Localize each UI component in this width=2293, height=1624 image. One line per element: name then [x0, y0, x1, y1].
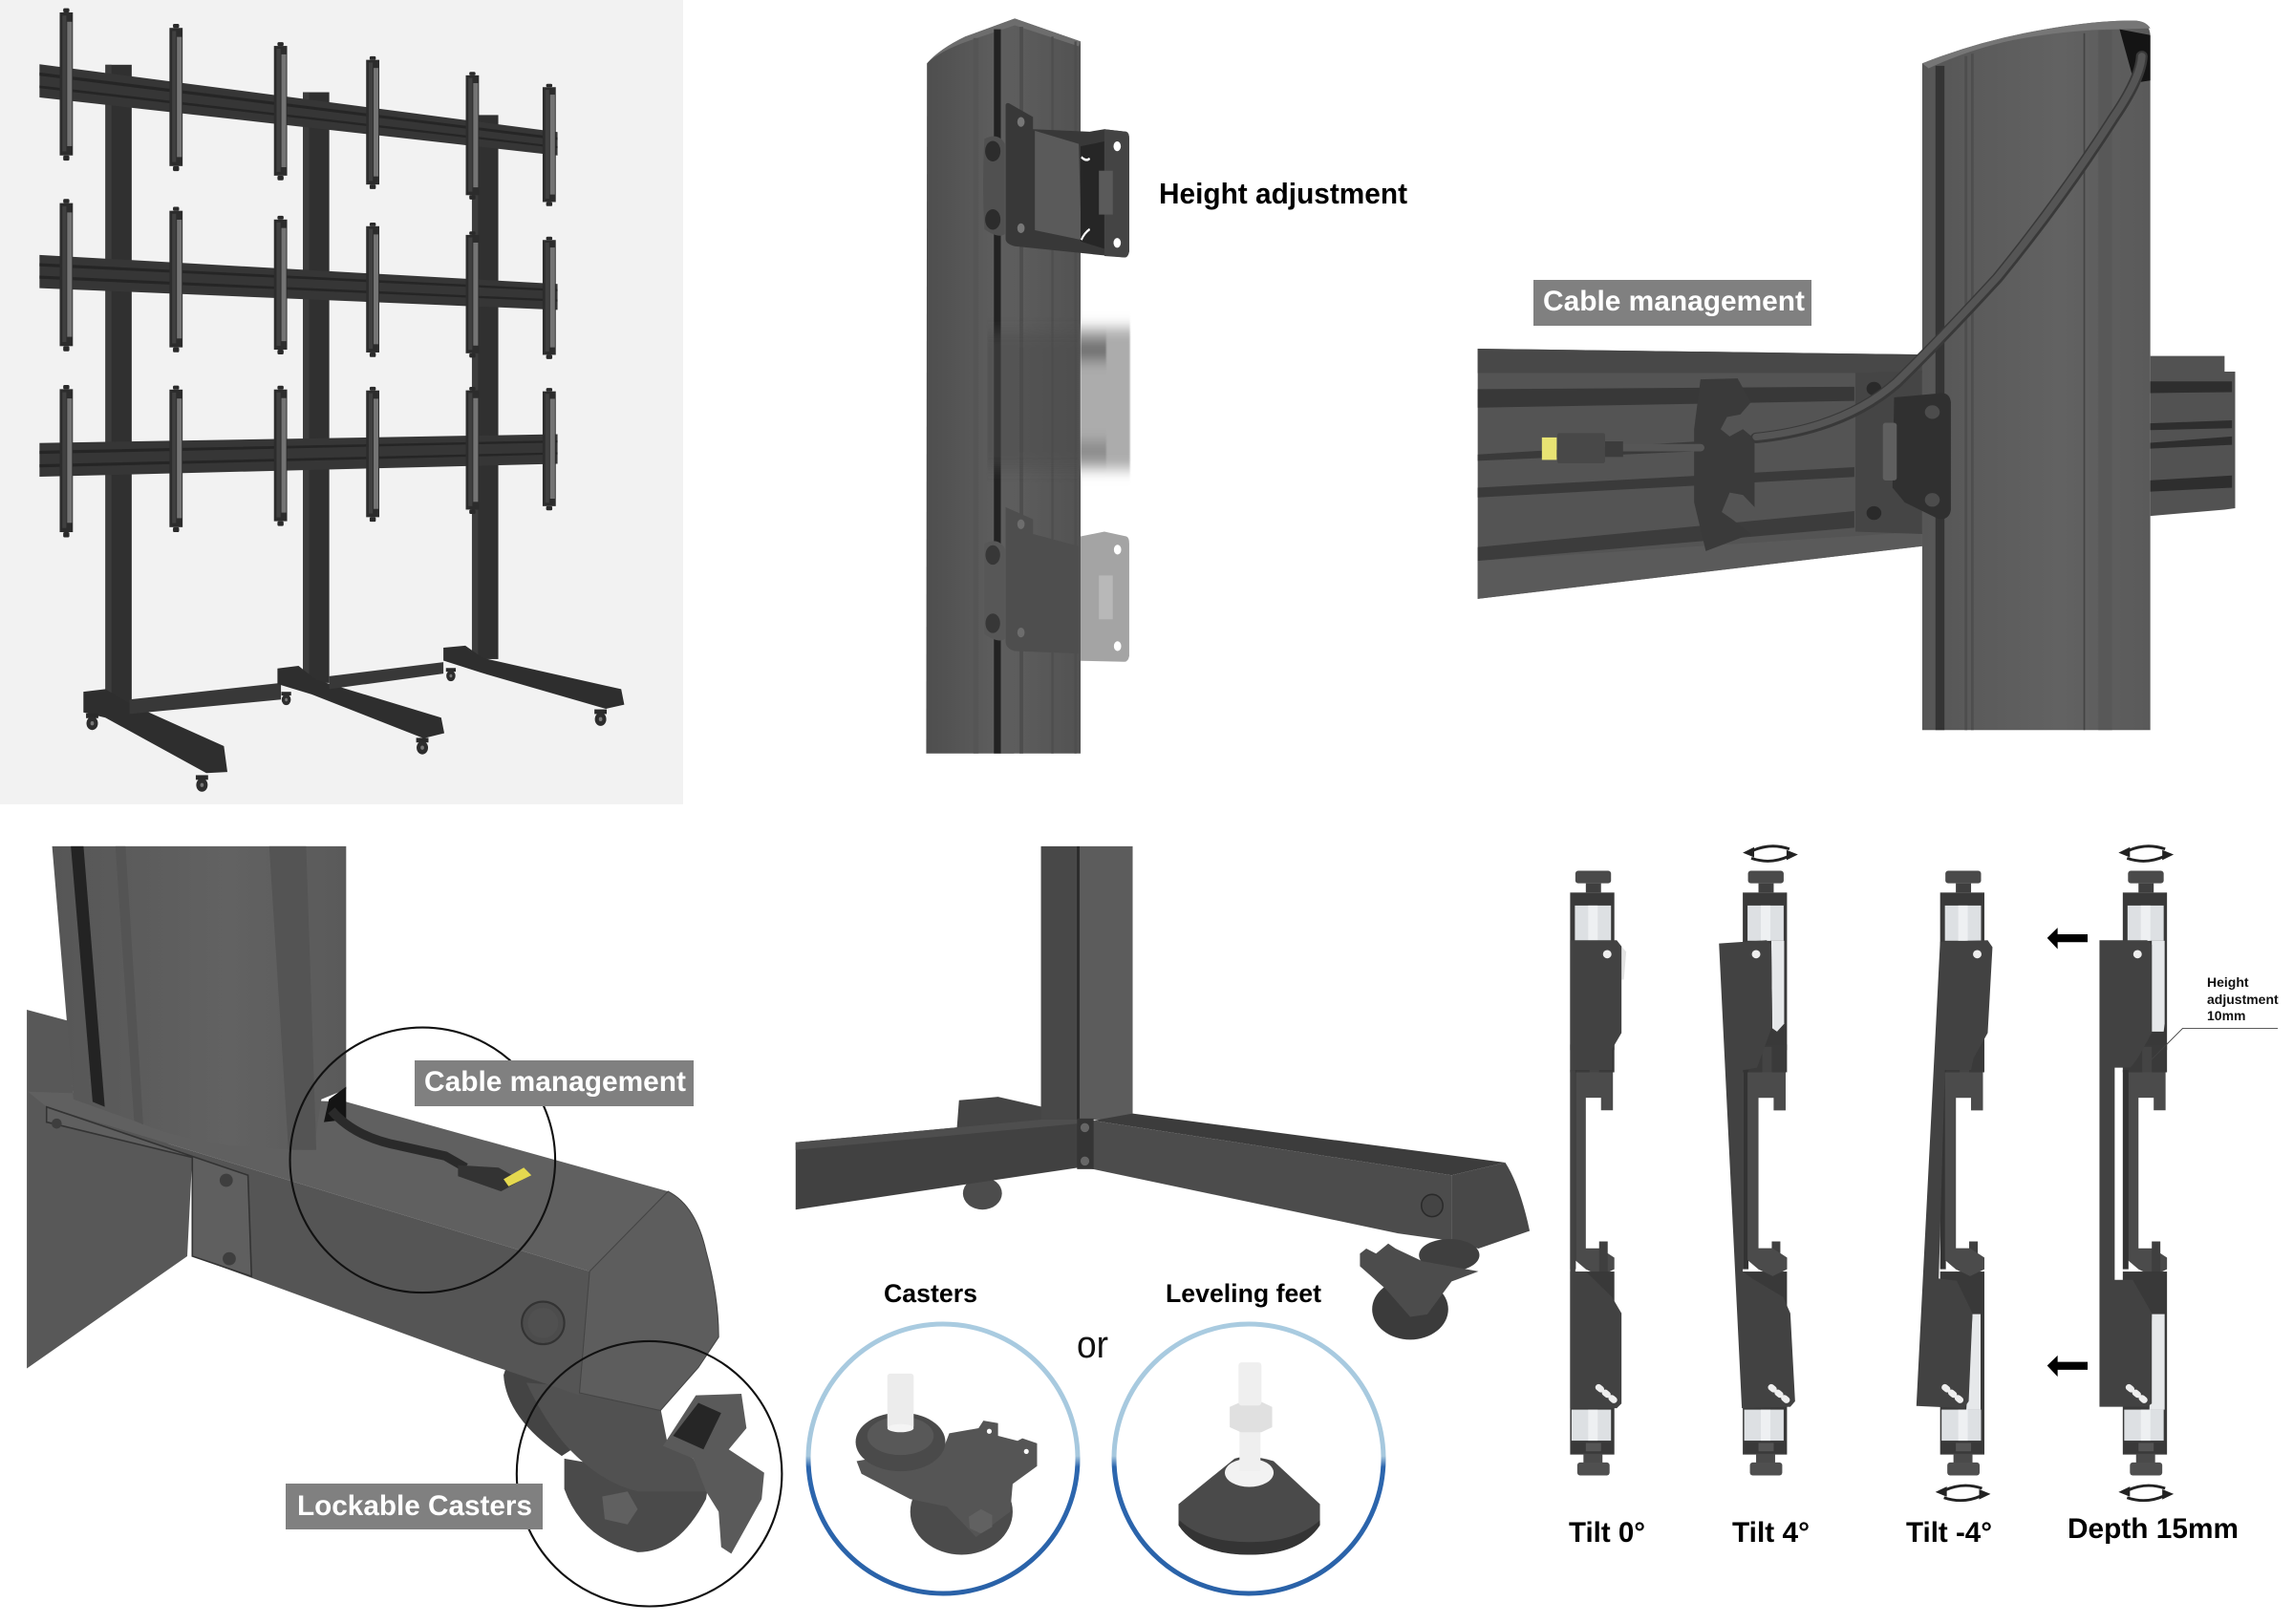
panel: base with cable management and lockable casters — [27, 846, 782, 1607]
mount: tilt -4 — [1917, 871, 1992, 1475]
label: Tilt 0°: Tilt 0° — [1569, 1517, 1645, 1549]
label: Tilt 4°: Tilt 4° — [1732, 1517, 1810, 1549]
stand drawing: posts, rails, brackets, base — [39, 9, 624, 792]
bracket upper — [983, 103, 1129, 258]
heading: Casters: Casters — [884, 1279, 977, 1308]
label: Depth 15mm: Depth 15mm — [2068, 1513, 2239, 1545]
mount: depth 15mm — [2099, 871, 2167, 1475]
text: or: or — [1077, 1324, 1108, 1366]
note: height adjustment 10mm: adjustment — [2207, 992, 2279, 1007]
post — [926, 18, 1081, 754]
heading: Height adjustment: Height adjustment — [1159, 177, 1407, 210]
bracket lower ghost — [984, 507, 1129, 662]
label: Lockable Casters — [286, 1484, 543, 1529]
label: Cable management (rail): Cable management — [1543, 286, 1805, 317]
caster — [504, 1367, 764, 1553]
leveling foot icon — [1179, 1362, 1320, 1554]
arrow: depth top — [2047, 928, 2088, 949]
mount: tilt 4 — [1719, 871, 1795, 1475]
back wall — [27, 1010, 192, 1369]
caster option icon — [856, 1374, 1037, 1554]
label: Tilt -4°: Tilt -4° — [1906, 1517, 1992, 1549]
post — [1883, 20, 2151, 730]
rail front — [1478, 349, 1922, 599]
mounting plates — [1855, 371, 1922, 534]
leader line — [2148, 1028, 2278, 1063]
cable — [1621, 56, 2142, 448]
rail clip — [1694, 378, 1754, 551]
post — [1041, 846, 1133, 1122]
label: Lockable Casters: Lockable Casters — [297, 1490, 532, 1522]
end cap — [580, 1191, 718, 1411]
panel: full video wall stand product view — [0, 0, 683, 804]
arrow: depth bottom — [2047, 1356, 2088, 1377]
note: height adjustment 10mm: Height — [2207, 974, 2249, 990]
label: Cable management (base): Cable management — [424, 1066, 686, 1098]
panel: cable management on rail — [1478, 20, 2235, 730]
base bars — [796, 1114, 1530, 1249]
HDMI connector — [1542, 433, 1623, 463]
mount: tilt 0 — [1570, 871, 1626, 1475]
back foot and rear caster — [956, 1097, 1042, 1209]
beam — [28, 1092, 668, 1396]
panel: height adjustment post — [926, 18, 1130, 754]
label: Cable management (base) — [415, 1060, 694, 1106]
highlight circle: lockable casters — [517, 1341, 782, 1607]
panel: tilt and depth side views — [1570, 846, 2278, 1501]
label: Cable management (rail) — [1533, 280, 1811, 326]
bracket motion blur — [987, 328, 1130, 469]
ring: casters — [808, 1324, 1078, 1593]
rotation arrows — [1743, 846, 2174, 1501]
cable with gold connector — [332, 1110, 531, 1191]
post — [53, 846, 346, 1150]
heading: Leveling feet: Leveling feet — [1166, 1279, 1321, 1308]
panel: post, base and caster options — [796, 846, 1530, 1554]
highlight circle: cable management — [290, 1028, 555, 1293]
ring: leveling feet — [1114, 1324, 1383, 1593]
front caster — [1360, 1239, 1479, 1339]
note: height adjustment 10mm: 10mm — [2207, 1008, 2245, 1023]
rail behind post — [2151, 356, 2235, 516]
